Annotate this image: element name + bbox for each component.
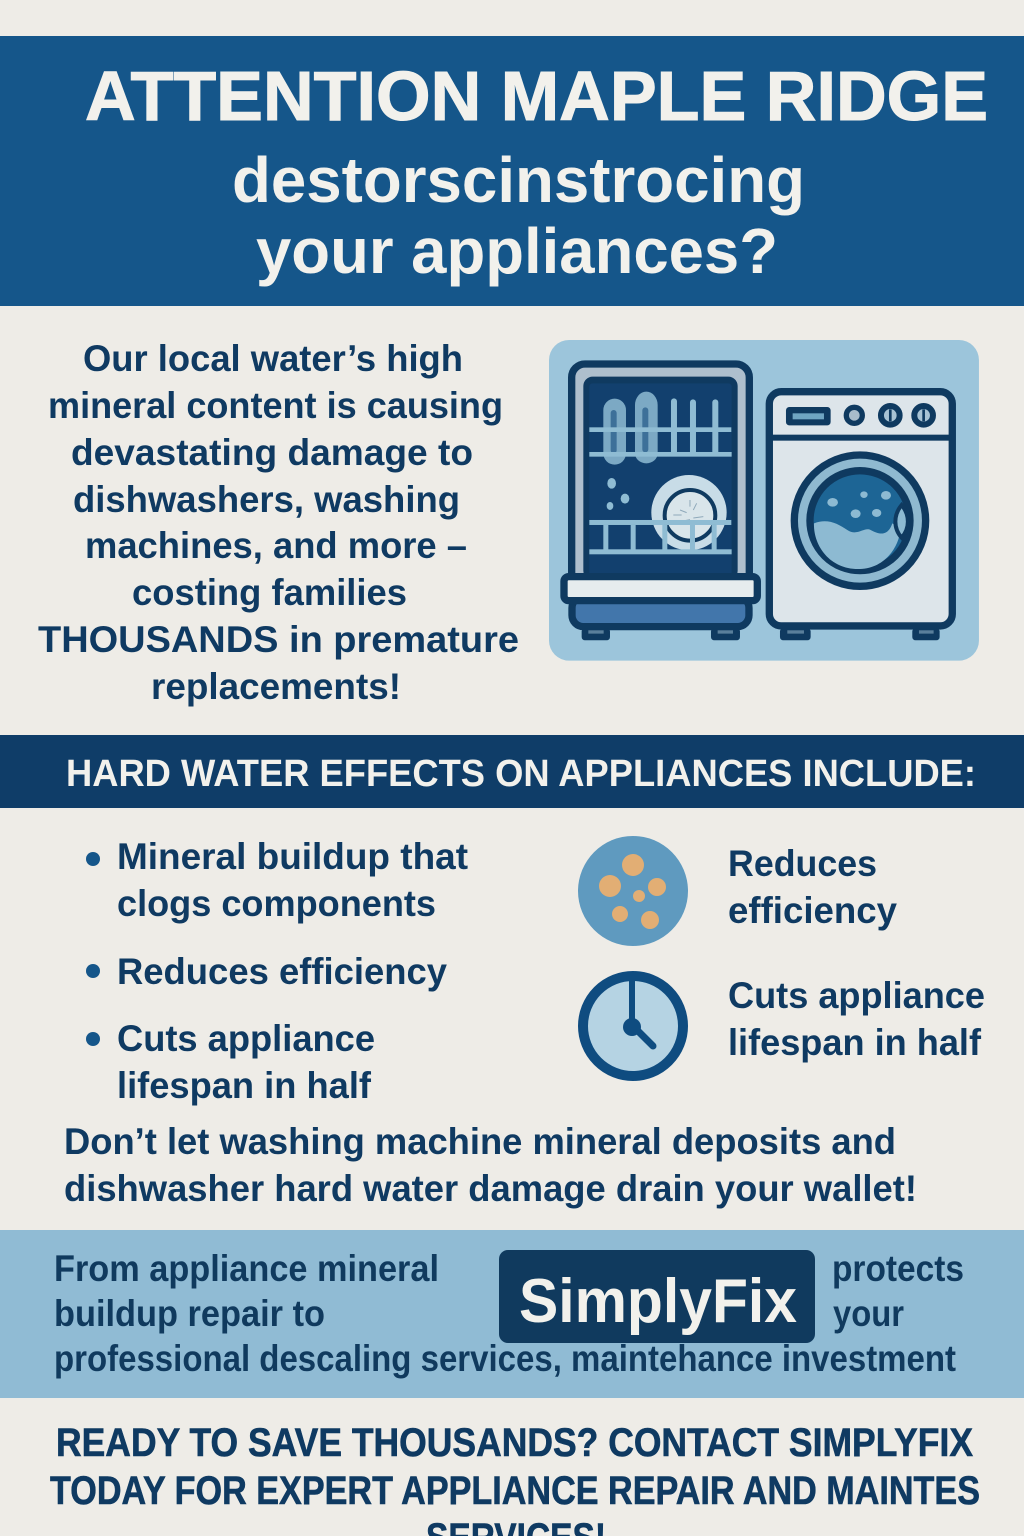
- text block: intro paragraph: replacements!: [151, 666, 401, 707]
- text: reduces efficiency: Reduces: [728, 843, 877, 884]
- text block: intro paragraph: costing families: [132, 572, 407, 613]
- call to action: [50, 1421, 980, 1536]
- text: cuts lifespan: lifespan in half: [728, 1022, 982, 1063]
- subtitle line 2: your appliances?: [256, 215, 778, 287]
- title: ATTENTION MAPLE RIDGE: [85, 57, 988, 135]
- panel: SimplyFix band: your: [833, 1293, 904, 1334]
- text block: intro paragraph: machines, and more –: [85, 525, 467, 566]
- text: cuts lifespan: Cuts appliance: [728, 975, 985, 1016]
- bullet list: effects: Mineral buildup that: [117, 836, 468, 877]
- text block: intro paragraph: dishwashers, washing: [73, 479, 460, 520]
- subtitle line 1: destorscinstrocing: [232, 144, 805, 216]
- bullet list: effects: clogs components: [117, 883, 436, 924]
- text: cuts lifespan: [728, 975, 985, 1063]
- illustration: dishwasher and washing machine: [549, 340, 979, 661]
- icon: clock: [583, 976, 683, 1076]
- panel: SimplyFix band: protects: [832, 1248, 964, 1289]
- icon: dishwasher: [564, 364, 757, 640]
- text: reduces efficiency: efficiency: [728, 890, 897, 931]
- text block: intro paragraph: devastating damage to: [71, 432, 473, 473]
- section heading banner: HARD WATER EFFECTS ON APPLIANCES INCLUDE:: [66, 753, 976, 795]
- text block: intro paragraph: mineral content is causing: [48, 385, 503, 426]
- panel: SimplyFix band: From appliance mineral: [54, 1248, 439, 1289]
- bullet list: effects: [86, 836, 468, 1106]
- panel: header banner: [0, 36, 1024, 306]
- text block: warning: Don’t let washing machine mineral deposits and: [64, 1121, 896, 1162]
- logo: SimplyFix: [499, 1250, 815, 1343]
- panel: SimplyFix band: buildup repair to: [54, 1293, 325, 1334]
- text block: intro paragraph: THOUSANDS in premature: [38, 619, 519, 660]
- bullet list: effects: lifespan in half: [117, 1065, 372, 1106]
- text block: intro paragraph: [38, 338, 519, 707]
- text block: warning: [64, 1121, 917, 1209]
- panel: SimplyFix band: [0, 1230, 1024, 1398]
- section heading banner: [0, 735, 1024, 808]
- icon: washing machine: [769, 392, 952, 640]
- bullet list: effects: Reduces efficiency: [117, 951, 447, 992]
- text block: warning: dishwasher hard water damage drain your wallet!: [64, 1168, 917, 1209]
- text: reduces efficiency: [728, 843, 897, 931]
- bullet list: effects: Cuts appliance: [117, 1018, 375, 1059]
- logo: SimplyFix: SimplyFix: [519, 1267, 797, 1336]
- text block: intro paragraph: Our local water’s high: [83, 338, 463, 379]
- icon: mineral deposits: [578, 836, 688, 946]
